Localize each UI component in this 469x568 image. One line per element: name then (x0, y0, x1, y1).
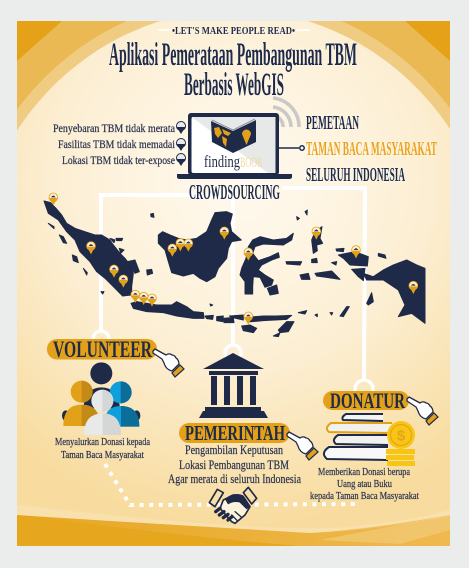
dotted path (105, 464, 360, 505)
pemerintah description (168, 443, 301, 486)
icon: pointing hand donatur (407, 397, 438, 425)
icon: government building (199, 353, 268, 418)
donatur pill: DONATUR (330, 388, 406, 413)
volunteer pill: VOLUNTEER (53, 337, 152, 362)
icon: wifi arcs (273, 98, 299, 127)
map pins (49, 193, 418, 325)
donatur description (310, 467, 419, 502)
bottom wave band (17, 505, 450, 546)
connector lines (101, 188, 365, 381)
icon: coins: $ (397, 428, 406, 444)
icon: laptop (177, 113, 292, 179)
volunteer description: Menyalurkan Donasi kepada (55, 437, 150, 448)
donatur description: kepada Taman Baca Masyarakat (310, 491, 419, 502)
map of Indonesia (44, 193, 425, 337)
problem list: Fasilitas TBM tidak memadai (58, 139, 175, 151)
mapping headline (306, 112, 437, 186)
pemerintah description: Lokasi Pembangunan TBM (179, 458, 289, 472)
problem list: Lokasi TBM tidak ter-expose (62, 155, 175, 167)
pemerintah pill: PEMERINTAH (185, 421, 285, 445)
icon: pointing hand volunteer (153, 349, 184, 377)
volunteer pill (47, 337, 157, 362)
icon: book stack (324, 414, 392, 460)
title: Berbasis WebGIS (184, 67, 284, 103)
donatur description: Uang atau Buku (337, 479, 392, 490)
icon: open book map (211, 119, 256, 153)
logo text: BOOK (240, 155, 263, 171)
donatur description: Memberikan Donasi berupa (318, 467, 410, 478)
mapping headline: PEMETAAN (306, 112, 359, 134)
volunteer description: Taman Baca Masyarakat (61, 450, 144, 461)
volunteer description (55, 437, 150, 461)
icon: pointing hand pemerintah (287, 432, 318, 460)
connector rings (93, 331, 373, 398)
problem list (53, 122, 186, 167)
pemerintah description: Agar merata di seluruh Indonesia (168, 472, 301, 486)
text: CROWDSOURCING (189, 180, 280, 204)
connector (278, 146, 304, 150)
pemerintah description: Pengambilan Keputusan (185, 443, 284, 457)
volunteer people icon (62, 362, 140, 435)
problem list: Penyebaran TBM tidak merata (53, 123, 175, 135)
donatur pill (323, 388, 409, 413)
icon: coins (386, 421, 415, 466)
logo text: finding (204, 152, 240, 171)
tagline: •LET'S MAKE PEOPLE READ• (172, 25, 295, 37)
title (109, 37, 357, 103)
icon: handshake (209, 487, 257, 523)
